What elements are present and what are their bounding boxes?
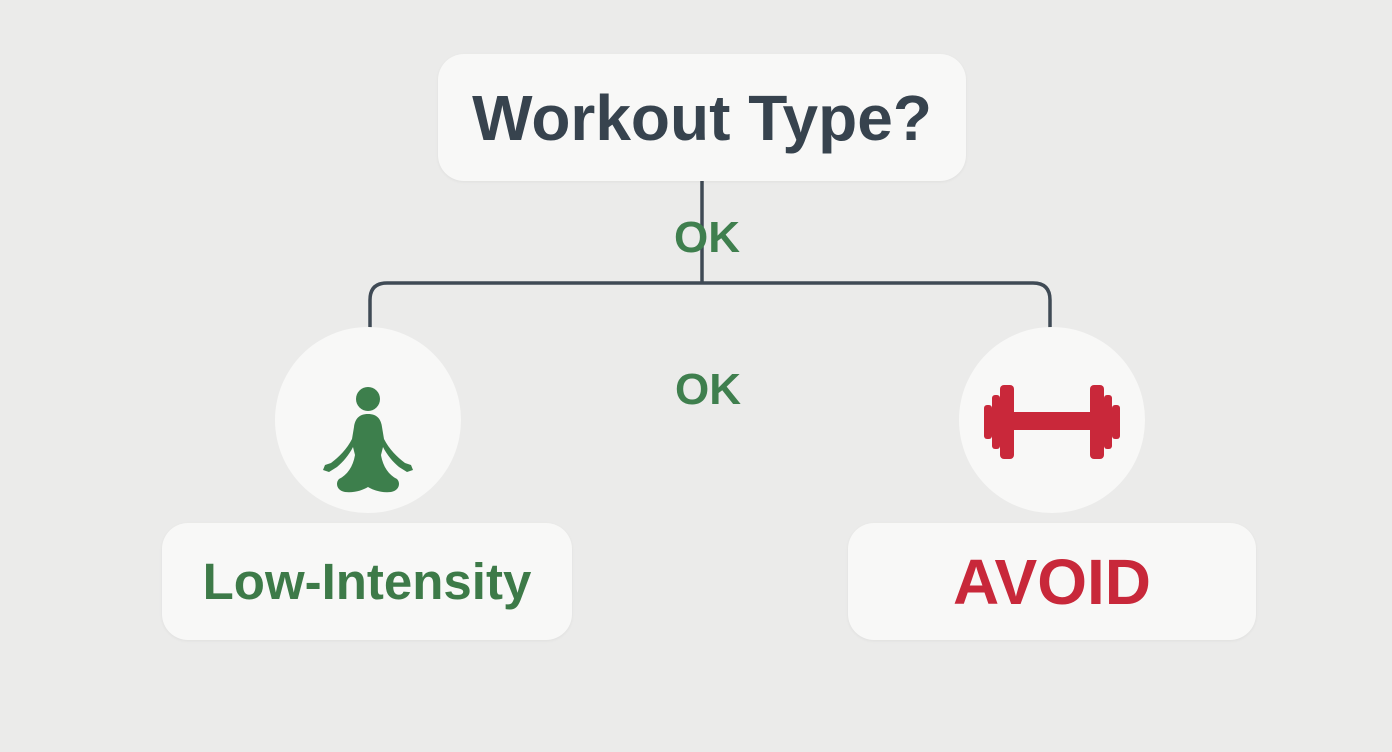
title box: Workout Type? [472,82,932,154]
icon circle: dumbbell [959,327,1145,513]
box: Low-Intensity: Low-Intensity [203,553,531,610]
icon circle: meditation [275,327,461,513]
label: OK middle: OK [675,365,741,414]
label: OK upper: OK [674,213,740,262]
title box [438,54,966,181]
box: Low-Intensity [162,523,572,640]
box: AVOID: AVOID [953,546,1151,618]
box: AVOID [848,523,1256,640]
